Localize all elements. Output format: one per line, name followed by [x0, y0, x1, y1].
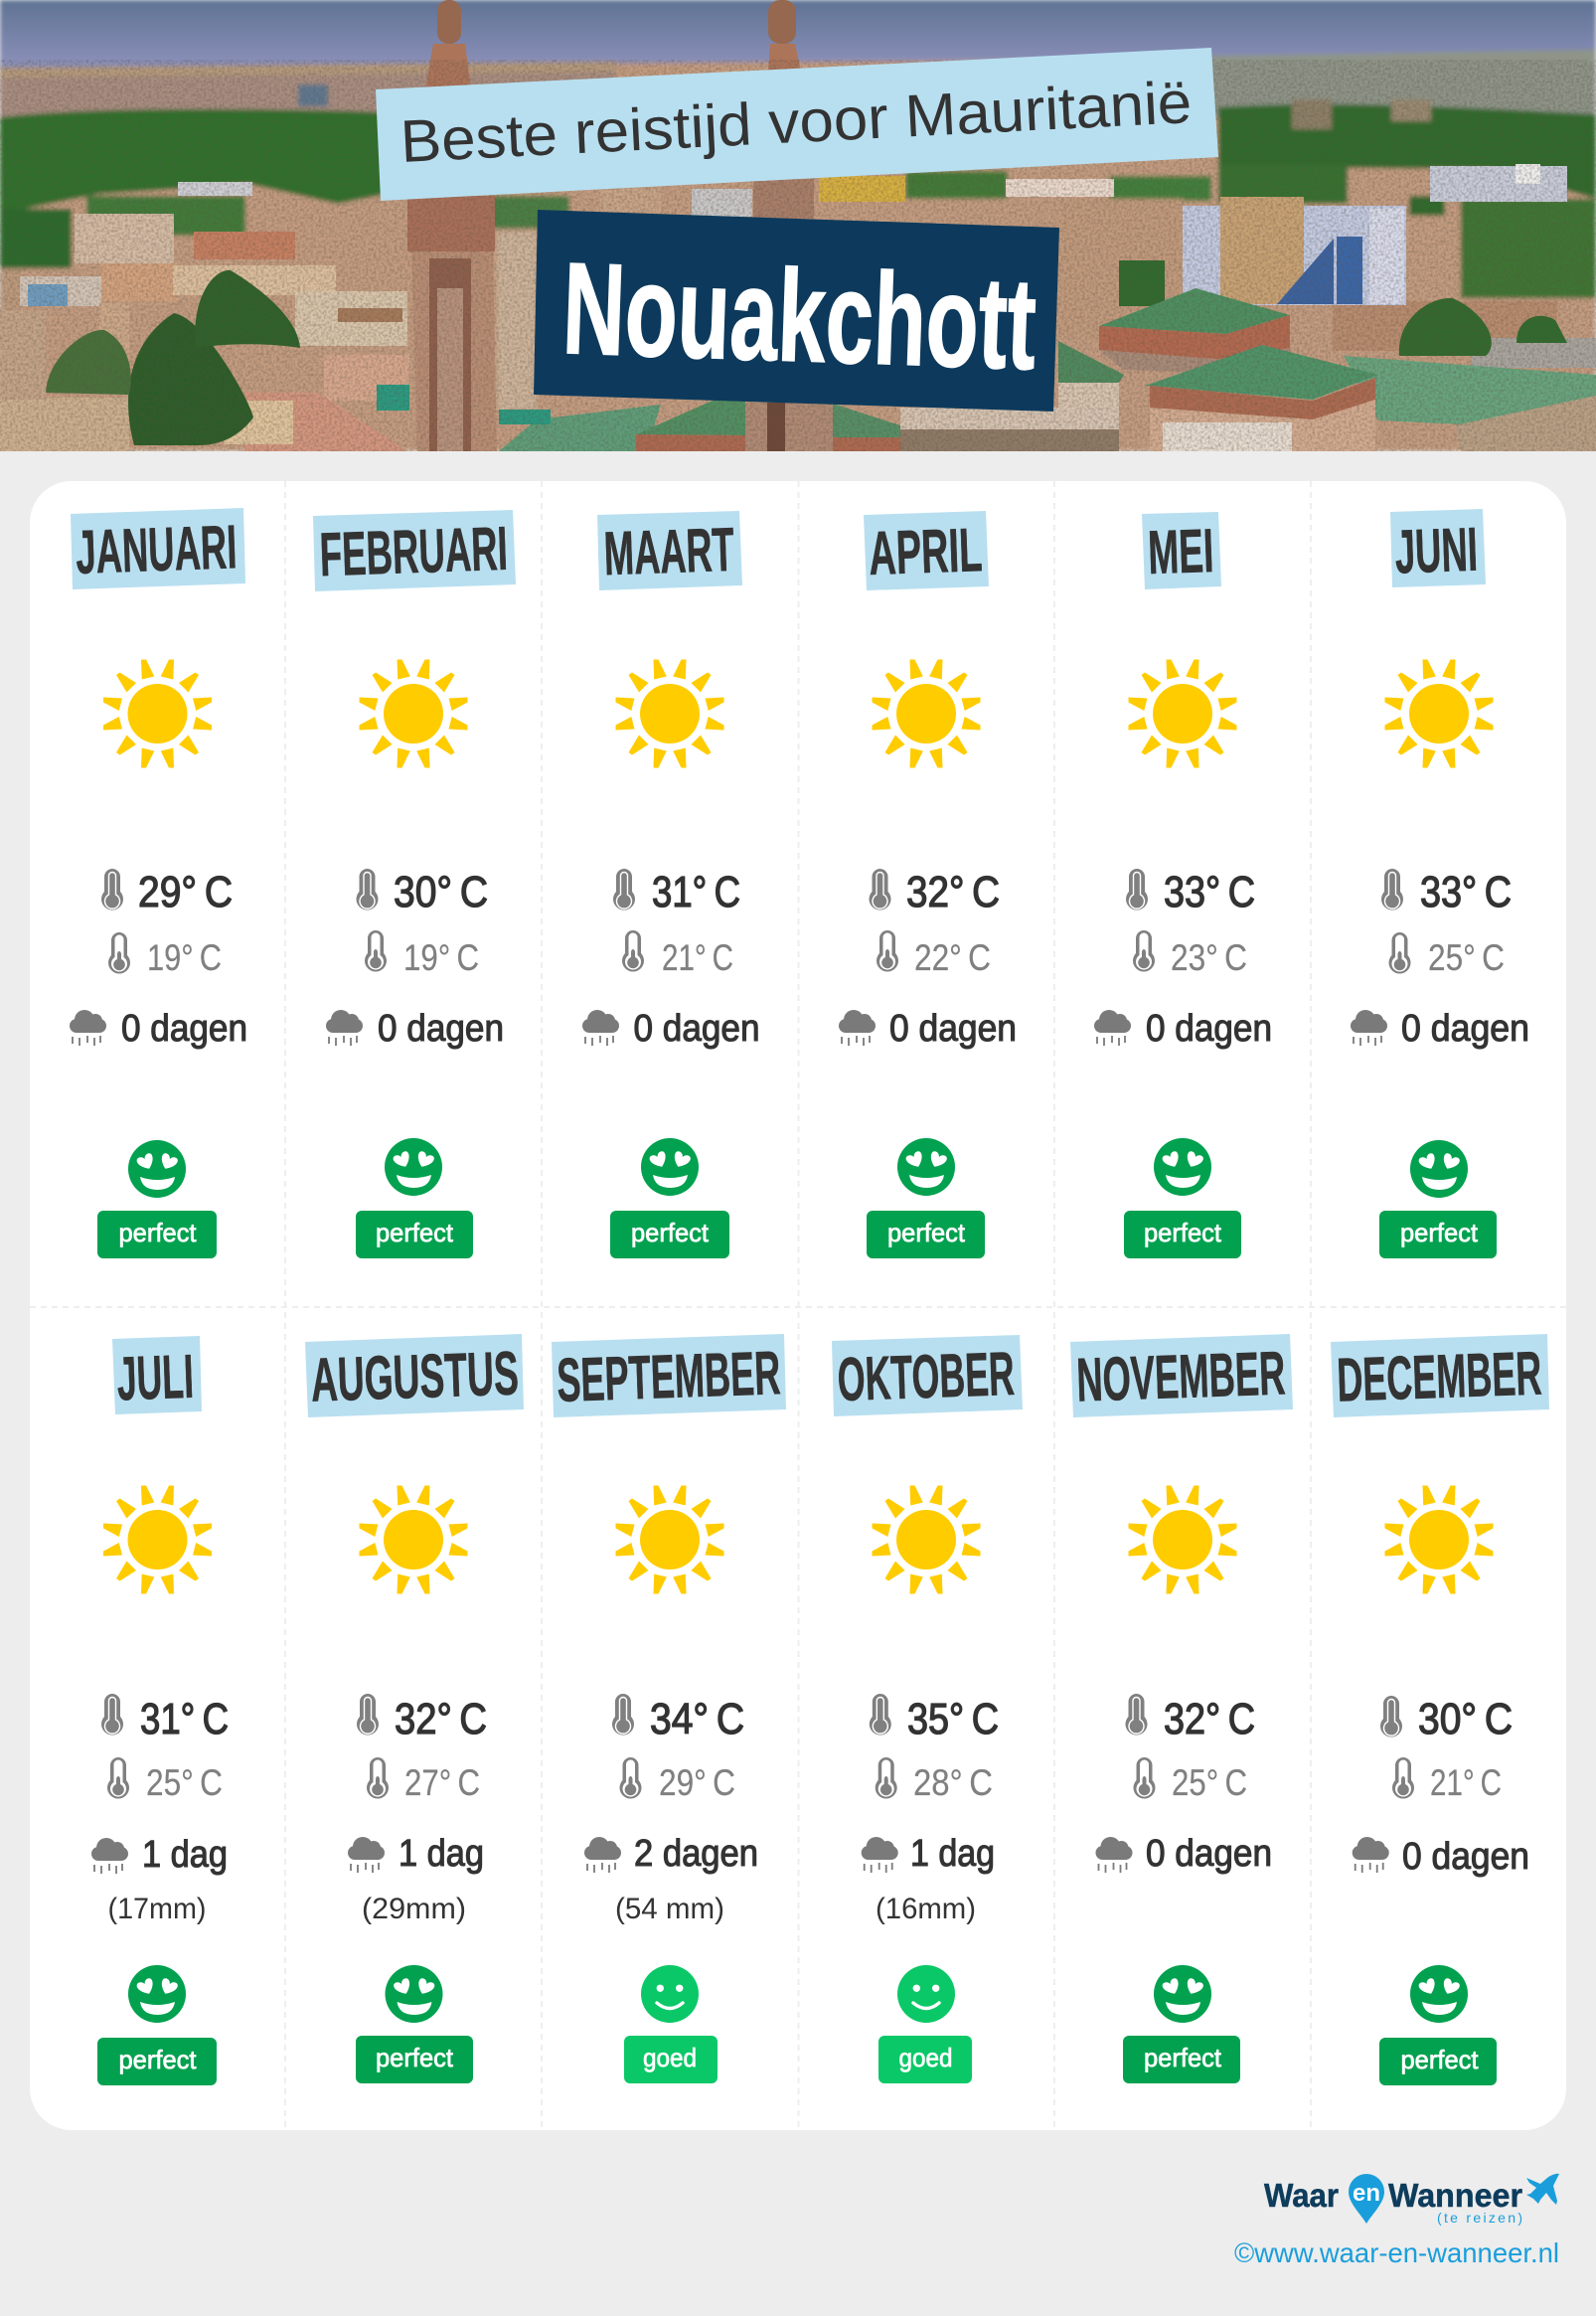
high temperature: 35° C	[907, 1695, 999, 1743]
column: december	[1331, 1334, 1549, 2085]
rain days: 0 dagen	[1146, 1833, 1272, 1875]
high temperature: 32° C	[1164, 1695, 1255, 1743]
column: november	[1070, 1334, 1293, 2083]
low temperature: 29° C	[659, 1762, 735, 1803]
rain days	[1353, 1836, 1529, 1878]
month label: FEBRUARI	[319, 515, 509, 589]
rain days: (16mm)	[876, 1893, 976, 1925]
rain days: 0 dagen	[378, 1008, 504, 1050]
icon: sun	[1129, 660, 1236, 767]
month label	[305, 1334, 524, 1417]
high temperature: 29° C	[138, 868, 233, 916]
rating: perfect: perfect	[887, 1218, 966, 1247]
high temperature: 34° C	[650, 1695, 744, 1743]
column: augustus	[305, 1334, 524, 2083]
month label	[597, 511, 742, 590]
column: maart	[582, 511, 759, 1258]
header photo: Nouakchott skyline	[0, 0, 1596, 451]
column: oktober	[832, 1335, 1023, 2083]
month label: JUNI	[1394, 516, 1479, 586]
high temperature	[356, 868, 488, 916]
low temperature	[367, 1757, 480, 1803]
rain days	[348, 1833, 484, 1925]
high temperature: 32° C	[395, 1695, 487, 1743]
rain days: 1 dag	[910, 1833, 995, 1875]
rain days: 0 dagen	[1401, 1008, 1529, 1050]
subtitle banner	[376, 48, 1218, 201]
icon: sun	[616, 1485, 723, 1594]
low temperature	[620, 1757, 735, 1803]
month label	[864, 511, 989, 590]
rating: perfect	[97, 1965, 217, 2085]
low temperature: 28° C	[913, 1762, 993, 1803]
month label	[552, 1334, 786, 1417]
low temperature: 25° C	[1428, 937, 1505, 978]
icon: sun	[1385, 660, 1493, 767]
low temperature: 25° C	[146, 1762, 223, 1803]
rain days: (54 mm)	[615, 1893, 724, 1925]
month label: NOVEMBER	[1075, 1339, 1286, 1415]
high temperature	[1380, 1695, 1513, 1743]
rating: perfect: perfect	[376, 2043, 454, 2072]
month label: MAART	[603, 516, 735, 588]
rain days: 0 dagen	[1146, 1008, 1272, 1050]
rating: goed: goed	[898, 2043, 952, 2072]
low temperature	[877, 930, 991, 978]
icon: map pin: en	[1353, 2180, 1380, 2207]
rain days	[91, 1834, 228, 1925]
rating: perfect	[867, 1138, 985, 1258]
rating: goed	[878, 1965, 972, 2083]
column: januari	[70, 508, 247, 1258]
month label: JULI	[116, 1343, 195, 1413]
column: juni	[1351, 509, 1529, 1258]
high temperature: 33° C	[1164, 868, 1255, 916]
month label: OKTOBER	[837, 1340, 1016, 1414]
high temperature	[612, 1694, 744, 1743]
rain days	[70, 1008, 247, 1050]
rating: perfect	[356, 1138, 473, 1258]
rating: perfect	[610, 1138, 729, 1258]
rain days: 0 dagen	[634, 1008, 759, 1050]
low temperature: 23° C	[1171, 937, 1247, 978]
high temperature: 31° C	[652, 868, 740, 916]
city title banner	[534, 210, 1059, 412]
month label: JANUARI	[75, 513, 238, 587]
logo: Waar en Wanneer: Wanneer	[1388, 2177, 1522, 2214]
rain days: 1 dag	[399, 1833, 484, 1875]
high temperature	[1381, 868, 1512, 916]
month label: AUGUSTUS	[310, 1339, 520, 1415]
high temperature: 31° C	[140, 1695, 229, 1743]
rain days	[326, 1008, 504, 1050]
month label	[1070, 1334, 1293, 1417]
low temperature: 27° C	[404, 1762, 480, 1803]
panel: monthly climate table	[30, 481, 1566, 2130]
month label: MEI	[1147, 517, 1214, 587]
low temperature	[1133, 930, 1247, 978]
low temperature	[1133, 1757, 1247, 1803]
rating: perfect: perfect	[631, 1218, 710, 1247]
icon: sun	[873, 1485, 980, 1594]
logo: Waar en Wanneer	[1264, 2174, 1559, 2226]
rating: perfect	[1124, 1138, 1241, 1258]
high temperature	[613, 868, 740, 916]
month label	[1390, 509, 1486, 587]
low temperature: 22° C	[914, 937, 991, 978]
low temperature: 21° C	[1430, 1762, 1502, 1803]
rain days	[1351, 1008, 1529, 1050]
low temperature	[108, 932, 222, 978]
rain days: 1 dag	[142, 1834, 228, 1876]
rain days	[1094, 1008, 1272, 1050]
rain days: 2 dagen	[634, 1833, 758, 1875]
high temperature	[101, 1694, 229, 1743]
icon: sun	[1129, 1485, 1236, 1594]
icon: sun	[616, 660, 723, 767]
rating: perfect	[356, 1965, 473, 2083]
icon: sun	[103, 1485, 212, 1594]
column: mei	[1094, 512, 1272, 1258]
rating: goed	[624, 1965, 718, 2083]
column: februari	[313, 510, 516, 1258]
low temperature	[365, 930, 479, 978]
rain days: (17mm)	[107, 1893, 207, 1925]
low temperature: 21° C	[662, 937, 733, 978]
month label: APRIL	[868, 516, 983, 588]
icon: sun	[360, 1485, 467, 1594]
icon: sun	[873, 660, 980, 767]
month label	[832, 1335, 1023, 1416]
month label	[71, 508, 245, 589]
month label	[112, 1336, 202, 1414]
low temperature	[876, 1757, 993, 1803]
high temperature: 30° C	[1418, 1695, 1513, 1743]
high temperature: 30° C	[394, 868, 488, 916]
rain days	[582, 1008, 759, 1050]
rating: perfect	[97, 1140, 217, 1258]
logo: Waar en Wanneer: Waar	[1264, 2177, 1339, 2214]
rating: perfect: perfect	[1144, 2043, 1222, 2072]
month label	[1142, 512, 1221, 589]
low temperature	[1392, 1757, 1502, 1803]
rain days: (29mm)	[362, 1893, 466, 1925]
high temperature	[869, 868, 1000, 916]
rain days: 0 dagen	[121, 1008, 247, 1050]
month label	[313, 510, 516, 591]
high temperature	[357, 1694, 487, 1743]
rating: perfect: perfect	[1400, 1218, 1479, 1247]
low temperature: 25° C	[1172, 1762, 1247, 1803]
rating: perfect: perfect	[119, 2045, 197, 2074]
rating: perfect: perfect	[1401, 2045, 1479, 2074]
rating: goed: goed	[643, 2043, 697, 2072]
icon: sun	[103, 660, 212, 767]
high temperature	[101, 868, 233, 916]
subtitle banner: Beste reistijd voor Mauritanië	[399, 69, 1194, 175]
low temperature	[1389, 932, 1505, 978]
source url: ©www.waar-en-wanneer.nl	[1234, 2237, 1559, 2268]
icon: sun	[1385, 1485, 1493, 1594]
icon: map pin	[1349, 2174, 1384, 2224]
low temperature: 19° C	[147, 937, 222, 978]
column: april	[839, 511, 1017, 1258]
column: juli	[91, 1336, 229, 2085]
rain days	[862, 1833, 995, 1925]
rating: perfect	[1379, 1965, 1497, 2085]
low temperature	[622, 930, 733, 978]
rain days: 0 dagen	[889, 1008, 1017, 1050]
logo: Waar en Wanneer: (te reizen)	[1437, 2210, 1522, 2226]
rain days: 0 dagen	[1402, 1836, 1529, 1878]
rating: perfect: perfect	[376, 1218, 454, 1247]
high temperature: 32° C	[906, 868, 1000, 916]
icon: sun	[360, 660, 467, 767]
low temperature	[107, 1757, 223, 1803]
high temperature	[1125, 1694, 1255, 1743]
rain days	[584, 1833, 758, 1925]
rating: perfect: perfect	[119, 1218, 197, 1247]
icon: plane	[1526, 2174, 1559, 2205]
rain days	[1095, 1833, 1272, 1875]
city title banner: Nouakchott	[560, 235, 1038, 397]
low temperature: 19° C	[403, 937, 479, 978]
high temperature: 33° C	[1420, 868, 1512, 916]
rain days	[839, 1008, 1017, 1050]
column: september	[552, 1334, 786, 2083]
rating: perfect	[1379, 1140, 1497, 1258]
rating: perfect: perfect	[1144, 1218, 1222, 1247]
high temperature	[870, 1694, 999, 1743]
month label: SEPTEMBER	[556, 1339, 781, 1415]
high temperature	[1126, 868, 1255, 916]
rating: perfect	[1123, 1965, 1240, 2083]
